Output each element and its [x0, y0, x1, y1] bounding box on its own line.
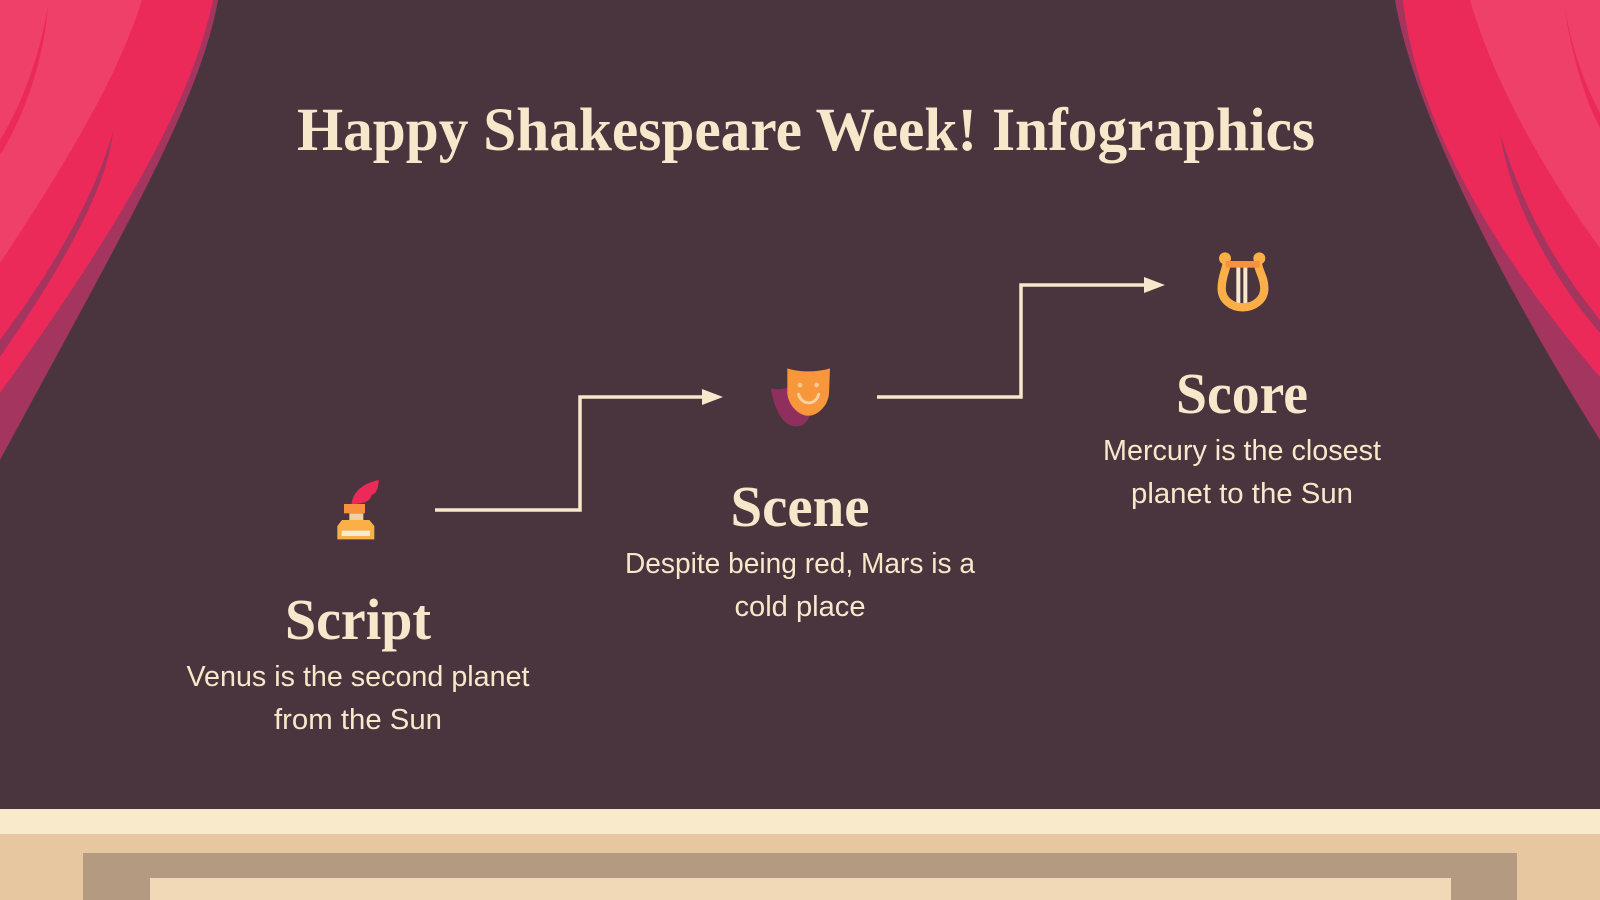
step: Script	[186, 587, 530, 736]
step: Score: planet to the Sun	[1131, 478, 1353, 510]
step: Score: Score	[1176, 361, 1308, 426]
icon: theatre masks	[771, 368, 830, 426]
step: Scene	[625, 474, 976, 623]
step: Scene: Scene	[730, 474, 870, 539]
step: Score	[1103, 361, 1381, 510]
step: Scene: Despite being red, Mars is a	[625, 548, 976, 580]
step: Score: Mercury is the closest	[1103, 435, 1381, 467]
stage floor	[0, 809, 1600, 900]
step: Script: Script	[285, 587, 432, 652]
step: Script: from the Sun	[274, 704, 442, 736]
title: Happy Shakespeare Week! Infographics	[297, 97, 1315, 164]
arrow: scene to score	[877, 277, 1165, 397]
right curtain	[1395, 0, 1600, 440]
icon: lyre	[1219, 252, 1265, 307]
icon: quill and inkwell	[337, 480, 379, 539]
arrow: script to scene	[435, 389, 723, 510]
step: Script: Venus is the second planet	[186, 661, 530, 693]
step: Scene: cold place	[734, 591, 866, 623]
left curtain	[0, 0, 218, 460]
